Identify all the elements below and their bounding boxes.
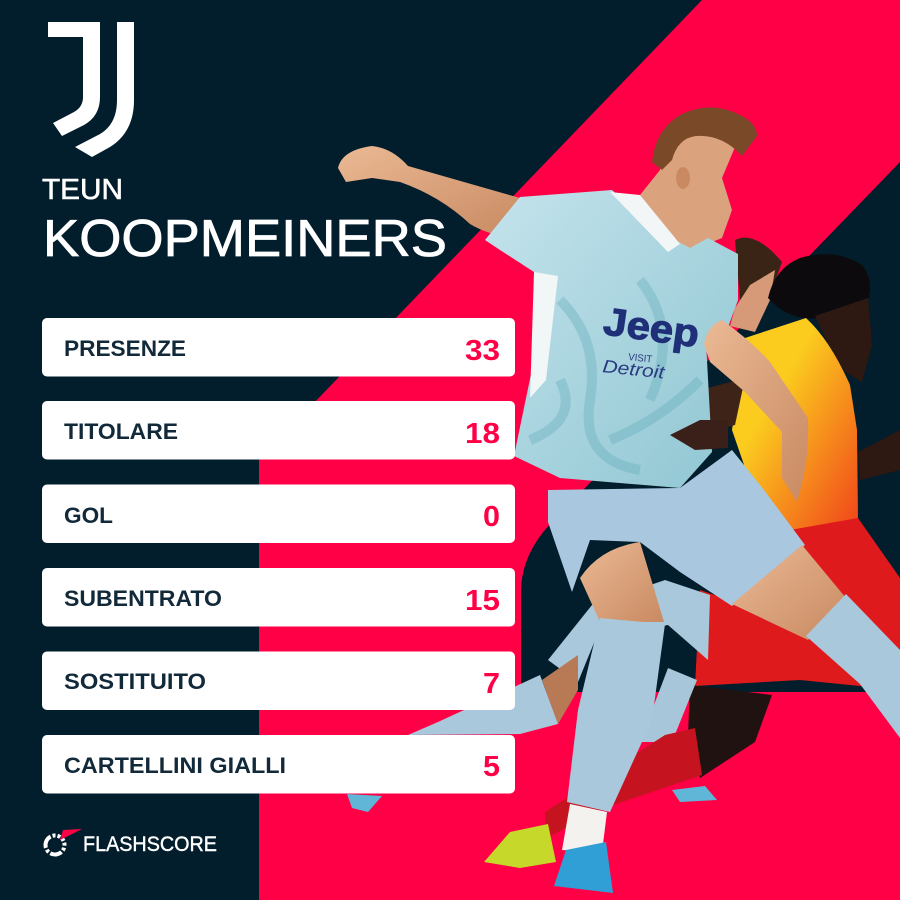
stat row: sostituito	[42, 652, 515, 710]
jersey: VISIT	[628, 352, 653, 365]
stat row: gol	[42, 484, 515, 543]
footer: Flashscore logo	[44, 829, 217, 856]
stat row: cartellini gialli	[42, 735, 515, 794]
extended arm	[338, 146, 520, 238]
stat row: cartellini gialli: 5	[483, 751, 500, 783]
jersey	[485, 190, 738, 488]
stat row: subentrato	[42, 568, 515, 626]
jersey sponsor text: Jeep	[601, 300, 702, 356]
brand name: FLASHSCORE	[83, 833, 217, 856]
stat row: sostituito: 7	[483, 668, 500, 700]
stat row: subentrato: 15	[465, 585, 500, 617]
icon: Flashscore speedometer	[44, 829, 82, 856]
stat row: sostituito: SOSTITUITO	[64, 669, 206, 694]
legs	[554, 542, 900, 893]
icon: Juventus logo	[48, 22, 134, 157]
stat row: presenze: PRESENZE	[64, 336, 186, 361]
player illustration	[338, 107, 900, 893]
jersey: Detroit	[602, 356, 666, 383]
stat row: titolare: 18	[465, 418, 500, 450]
hand of opponent	[670, 420, 728, 450]
stat row: subentrato: SUBENTRATO	[64, 586, 222, 611]
stat row: titolare: TITOLARE	[64, 419, 178, 444]
other arm	[704, 320, 808, 502]
head	[640, 107, 757, 250]
opposing player	[484, 238, 900, 868]
stat row: gol: 0	[483, 501, 500, 533]
stat row: gol: GOL	[64, 503, 113, 528]
back leg	[347, 580, 710, 812]
stat row: titolare	[42, 401, 515, 460]
stat row: presenze	[42, 318, 515, 376]
last name: KOOPMEINERS	[43, 210, 447, 268]
stat row: presenze: 33	[465, 335, 500, 367]
shorts	[548, 450, 805, 606]
first name: TEUN	[42, 174, 123, 206]
stat row: cartellini gialli: CARTELLINI GIALLI	[64, 753, 286, 778]
